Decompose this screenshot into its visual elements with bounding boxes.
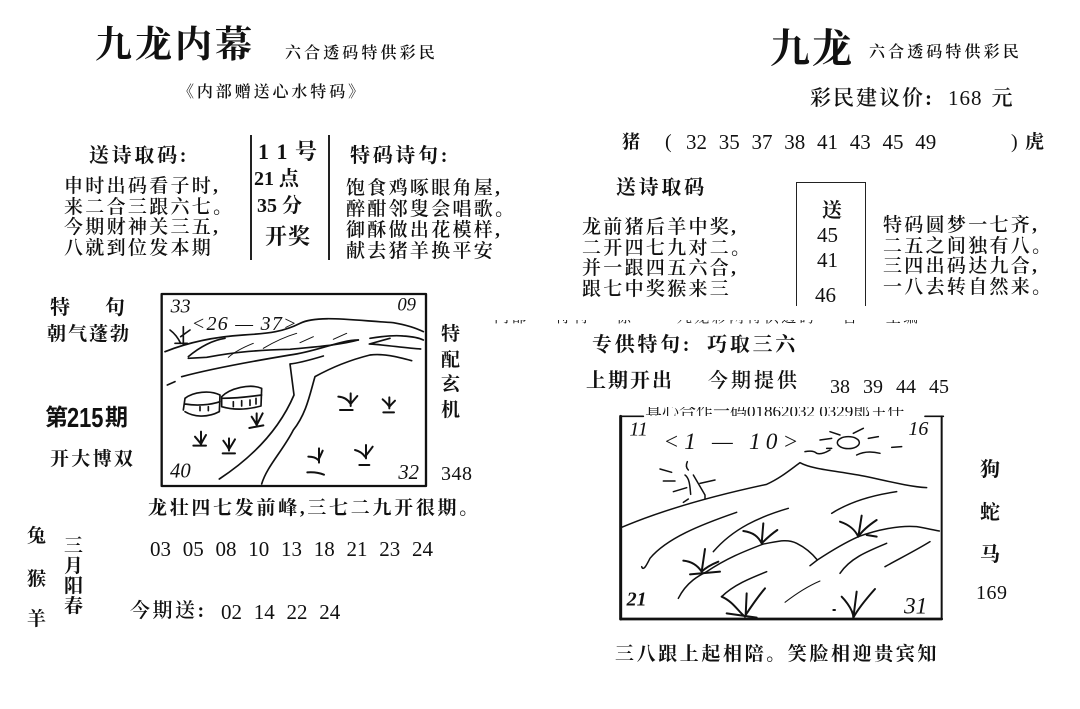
sketch right: hills and sun: 31: [903, 593, 927, 619]
title: 九龙内幕: 九龙内幕: [95, 25, 255, 66]
poem right 2: 二五之间独有八。: [883, 236, 1053, 256]
三月阳春 column: [64, 536, 83, 617]
issue number: 第: [45, 404, 68, 430]
number 348: 348: [441, 463, 472, 485]
poem right of left panel: 御酥做出花模样,: [346, 220, 502, 241]
zodiac column: 羊: [27, 609, 46, 630]
heading: 送诗取码 right: 送诗取码: [616, 177, 707, 199]
zodiac number line: ): [1011, 131, 1018, 153]
verse under left sketch: 龙壮四七发前峰,三七二九开很期。: [148, 498, 481, 519]
side label: 特配玄机: 玄: [441, 374, 460, 395]
side label: 特配玄机: 配: [441, 350, 460, 371]
title: 九龙: 九龙: [770, 26, 854, 71]
side label: 特配玄机: [441, 324, 460, 421]
sketch right: hills and sun: 11: [629, 419, 648, 441]
gift number box: 送: [822, 200, 842, 222]
heading: 送诗取码 left: 送诗取码:: [89, 145, 189, 167]
draw time block: 1 1 号: [258, 139, 318, 164]
开大博双: 开大博双: [50, 449, 135, 470]
zodiac column: 兔: [27, 526, 46, 547]
price: 彩民建议价: 168 元: [810, 86, 1014, 110]
zodiac number line: 虎: [1025, 132, 1044, 153]
side label: zodiac right: 蛇: [980, 502, 1000, 524]
poem right 1: 龙前猪后羊中奖,: [582, 217, 738, 238]
give-away numbers: 02 14 22 24: [221, 600, 340, 624]
三月阳春 column: 阳: [64, 576, 83, 597]
zodiac number line: (: [665, 131, 672, 153]
zodiac number line: 猪: [622, 132, 640, 152]
poem left: 来二合三跟六七。: [64, 196, 234, 218]
special phrase left: [47, 296, 131, 345]
sketch left: river and huts: 09: [397, 295, 417, 316]
verse under right sketch: 三八跟上起相陪。笑脸相迎贵宾知: [615, 644, 939, 665]
issue number: 215: [67, 402, 103, 433]
poem right of left panel: 醉酣邻叟会唱歌。: [346, 199, 516, 220]
sketch right: hills and sun: 21: [626, 589, 647, 611]
side label: 特配玄机: 特: [441, 324, 460, 345]
poem left: 申时出码看子时,: [64, 176, 220, 197]
subtitle right: 六合透码特供彩民: [869, 44, 1022, 61]
zodiac number line: [622, 130, 1044, 154]
last issue label: 上期开出 今期提供: [586, 370, 800, 392]
draw time block: 35 分: [257, 195, 302, 217]
heading: 特码诗句: 特码诗句:: [350, 145, 450, 167]
subtitle left: 六合透码特供彩民: [285, 45, 438, 62]
poem right 1: [582, 216, 752, 300]
今期送 label: 今期送:: [130, 600, 207, 622]
poem right of left panel: 献去猪羊换平安: [346, 241, 495, 262]
sketch left: river and huts: 32: [397, 462, 419, 484]
三月阳春 column: 三: [64, 536, 83, 557]
poem right 2: 特码圆梦一七齐,: [883, 215, 1039, 236]
poem left: [64, 176, 234, 258]
number 169: 169: [976, 582, 1008, 604]
sketch right: hills and sun: 16: [908, 418, 928, 440]
draw time block: [254, 139, 318, 249]
poem right 1: 二开四七九对二。: [582, 238, 752, 258]
side label: 特配玄机: 机: [441, 400, 460, 421]
divider lines around draw time: [250, 135, 252, 260]
issue number: 期: [105, 404, 128, 430]
zodiac column: 猴: [27, 569, 46, 590]
poem right 1: 跟七中奖猴来三: [582, 278, 731, 300]
poem left: 八就到位发本期: [64, 238, 213, 258]
poem right 1: 并一跟四五六合,: [582, 258, 738, 279]
tagline: 内部赠送心水特码: 《内部赠送心水特码》: [178, 84, 367, 101]
side label: zodiac right: 狗: [980, 459, 1000, 481]
poem right 2: [883, 214, 1053, 298]
poem left: 今期财神关三五,: [64, 217, 220, 238]
side label: zodiac right: [980, 458, 1000, 566]
special phrase left: 朝气蓬勃: [47, 324, 131, 345]
sketch left: river and huts: <26 — 37>: [192, 313, 297, 335]
poem right of left panel: 饱食鸡啄眼角屋,: [346, 178, 502, 199]
sketch left: river and huts: 33: [170, 295, 191, 317]
special phrase right: 专供特句: 巧取三六: [592, 334, 798, 356]
sketch right: hills and sun: <1 — 10>: [663, 429, 798, 455]
poem right of left panel: [346, 178, 516, 262]
gift number box: 46: [815, 283, 836, 307]
zodiac number line: 32 35 37 38 41 43 45 49: [686, 130, 936, 154]
gift number box: 41: [817, 248, 838, 272]
issue number: [45, 402, 128, 433]
三月阳春 column: 月: [64, 556, 83, 577]
special phrase left: 特 句: [50, 297, 125, 319]
draw time block: 21 点: [254, 168, 299, 190]
poem right 2: 三四出码达九合,: [883, 256, 1039, 277]
number row left: 03 05 08 10 13 18 21 23 24: [150, 537, 433, 561]
sketch left: river and huts: 40: [170, 460, 191, 482]
zodiac column: [27, 526, 46, 630]
三月阳春 column: 春: [64, 596, 83, 617]
draw time block: 开奖: [265, 224, 311, 249]
gift number box: [796, 182, 866, 306]
side label: zodiac right: 马: [980, 544, 1000, 566]
poem right 2: 一八去转自然来。: [883, 276, 1053, 298]
gift number box: 45: [817, 223, 838, 247]
